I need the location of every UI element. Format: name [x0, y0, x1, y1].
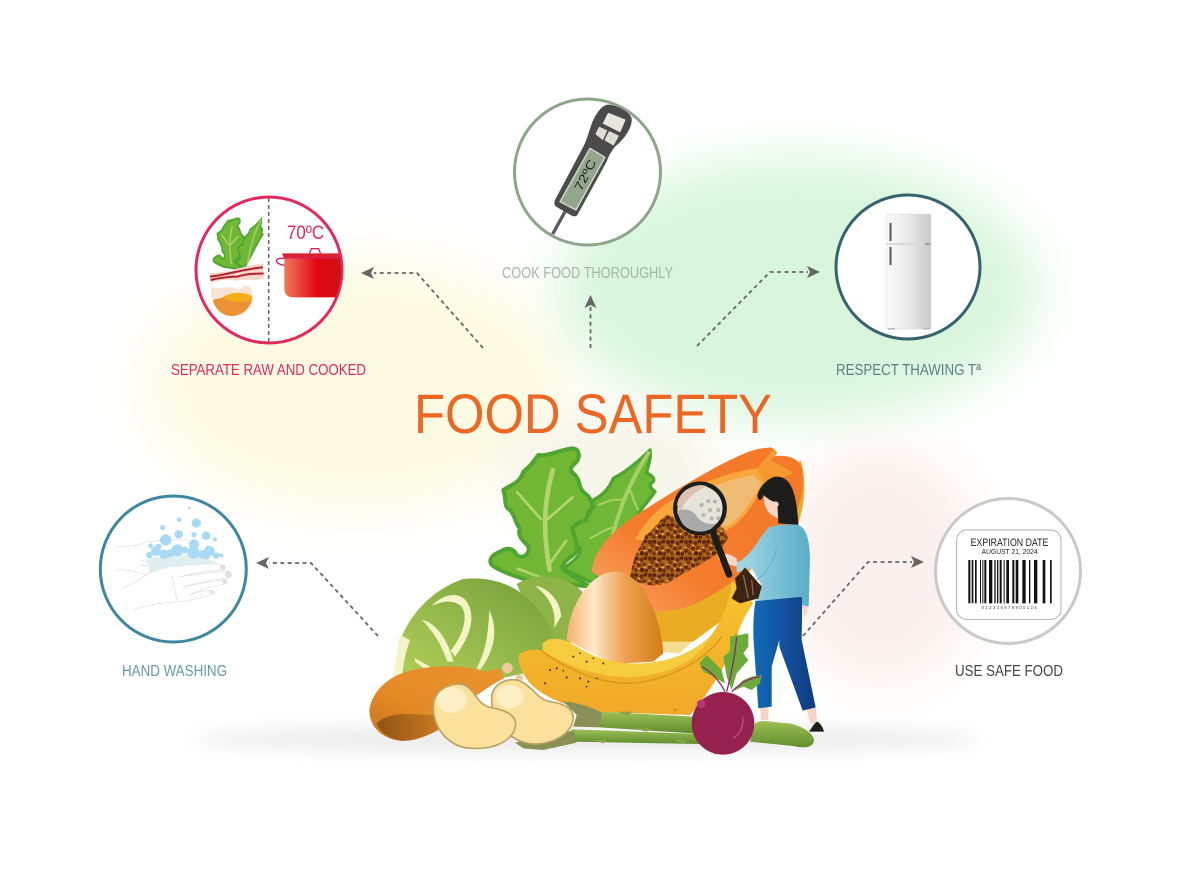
- bacon: [209, 263, 264, 283]
- panel: cook food thoroughly: [514, 99, 660, 245]
- hand: [718, 554, 737, 567]
- ankles: [760, 707, 817, 723]
- face: [764, 497, 778, 518]
- hands and bubbles: [117, 507, 232, 610]
- arrow: to hand washing: [256, 557, 378, 636]
- arrow: to safe food: [803, 556, 924, 636]
- egg: [567, 572, 663, 664]
- label: separate raw and cooked: SEPARATE RAW AND COOKED: [171, 362, 366, 379]
- hand outlines: [117, 540, 230, 610]
- title: FOOD SAFETY: [414, 382, 772, 445]
- panel: respect thawing: [836, 195, 980, 339]
- label: respect thawing: RESPECT THAWING Tª: [836, 362, 981, 379]
- soap foam: [146, 555, 219, 573]
- background colour washes: [145, 158, 1038, 685]
- lettuce: left leaf: [490, 448, 593, 587]
- broken egg: [211, 285, 253, 316]
- ground shadow: [192, 727, 982, 751]
- jeans: [753, 597, 816, 711]
- person: [718, 477, 824, 732]
- beans: [433, 680, 573, 748]
- arrow: to thawing: [697, 266, 820, 346]
- expiration label: [957, 530, 1061, 619]
- food illustration: [369, 447, 824, 755]
- arrow: to cook: [584, 295, 596, 348]
- beet root: [692, 692, 754, 755]
- arrow: to separate: [361, 267, 483, 348]
- thermometer: 72ºC: [572, 157, 599, 193]
- divider: [268, 198, 270, 342]
- temperature label: 70ºC: [287, 223, 324, 244]
- separate scene: [209, 218, 343, 316]
- label: use safe food: USE SAFE FOOD: [955, 663, 1063, 680]
- panel: use safe food: [936, 498, 1080, 644]
- sweater: [737, 524, 810, 607]
- barcode digits: 012345678900125: [982, 605, 1037, 610]
- magnifying glass: [675, 484, 729, 574]
- cabbage: back: [517, 576, 585, 643]
- fridge: [886, 214, 931, 330]
- chicken: [369, 663, 523, 741]
- asparagus: [515, 702, 814, 750]
- beet leaves: [699, 633, 762, 692]
- ear: [773, 501, 779, 507]
- lettuce: right leaf: [563, 450, 655, 583]
- panel: hand washing: [100, 496, 246, 642]
- label: cook food thoroughly: COOK FOOD THOROUGHLY: [502, 265, 673, 282]
- hand on waist: [803, 603, 807, 617]
- pale papaya flesh: [660, 640, 693, 653]
- bananas: [518, 582, 753, 715]
- papaya: [592, 447, 804, 642]
- expiration text: EXPIRATION DATE: [971, 537, 1049, 549]
- hair: [757, 477, 798, 525]
- small lettuce: [213, 218, 263, 270]
- label: hand washing: HAND WASHING: [122, 663, 227, 680]
- banana stem: [732, 567, 762, 603]
- pot: [284, 257, 343, 297]
- barcode: [968, 560, 1052, 603]
- bubbles: [146, 507, 223, 560]
- shoe: [809, 722, 824, 732]
- expiry date: AUGUST 21, 2024: [982, 547, 1038, 556]
- thermometer: [553, 105, 632, 234]
- cabbage: front: [393, 578, 561, 680]
- panel: separate raw and cooked: [196, 197, 343, 343]
